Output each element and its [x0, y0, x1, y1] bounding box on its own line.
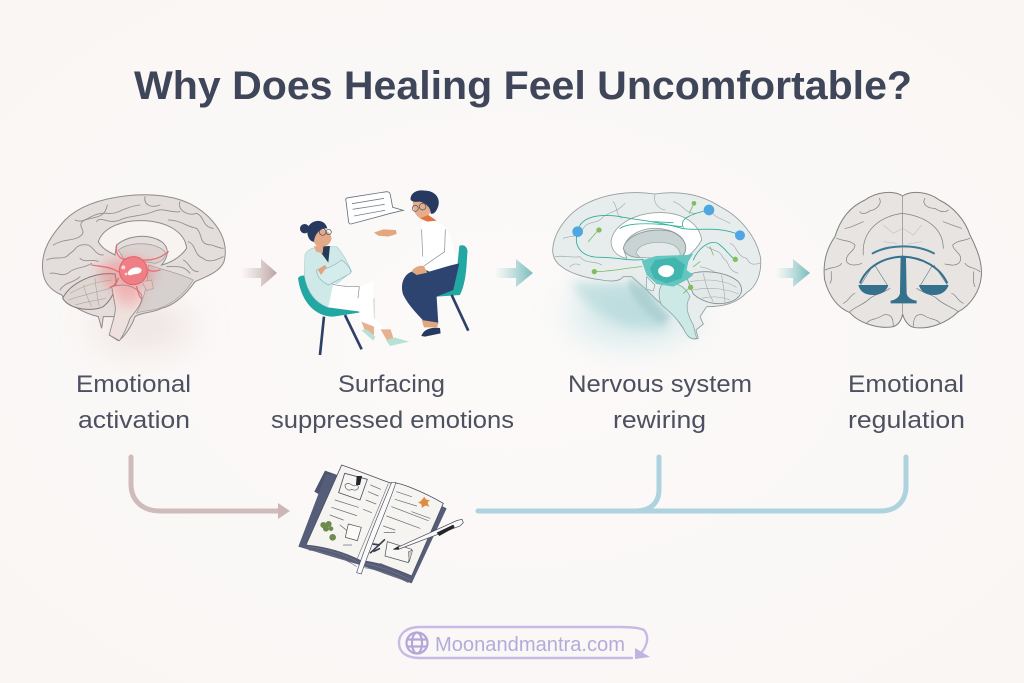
label: emotional regulation: regulation: [848, 407, 965, 434]
label: emotional regulation: [848, 371, 965, 434]
label: surfacing suppressed emotions: [271, 371, 514, 434]
balance scale: [858, 246, 949, 303]
client: [374, 190, 468, 337]
label: surfacing suppressed emotions: suppressed emotions: [271, 407, 514, 434]
label: surfacing suppressed emotions: Surfacing: [338, 371, 445, 398]
label: emotional regulation: Emotional: [848, 371, 964, 398]
arrow: activation down to journal: [131, 457, 290, 519]
icon: brain with red emotional activation: [42, 195, 225, 348]
title: Why Does Healing Feel Uncomfortable?: [134, 64, 912, 108]
speech bubble: [346, 192, 403, 224]
label: emotional activation: Emotional: [76, 371, 191, 398]
label: nervous system rewiring: rewiring: [613, 407, 706, 434]
icon: therapist and client in conversation: [298, 190, 468, 355]
therapist: [298, 221, 409, 355]
label: nervous system rewiring: Nervous system: [568, 371, 752, 398]
arrow: activation to surfacing: [241, 259, 277, 287]
arrow: rewiring to regulation: [776, 259, 810, 287]
label: emotional activation: [76, 371, 191, 434]
website badge: [399, 627, 650, 659]
label: emotional activation: activation: [78, 407, 190, 434]
icon: front-view brain with balance scale: [824, 192, 981, 328]
connector: journal to rewiring and regulation: [478, 457, 906, 511]
label: nervous system rewiring: [568, 371, 752, 434]
website badge: Moonandmantra.com: [435, 633, 625, 656]
arrow: surfacing to rewiring: [495, 259, 533, 287]
icon: brain with rewired neural pathways: [553, 193, 761, 342]
neural nodes: [572, 201, 745, 290]
icon: globe: [406, 632, 428, 654]
icon: open journal with pen: [298, 465, 463, 583]
